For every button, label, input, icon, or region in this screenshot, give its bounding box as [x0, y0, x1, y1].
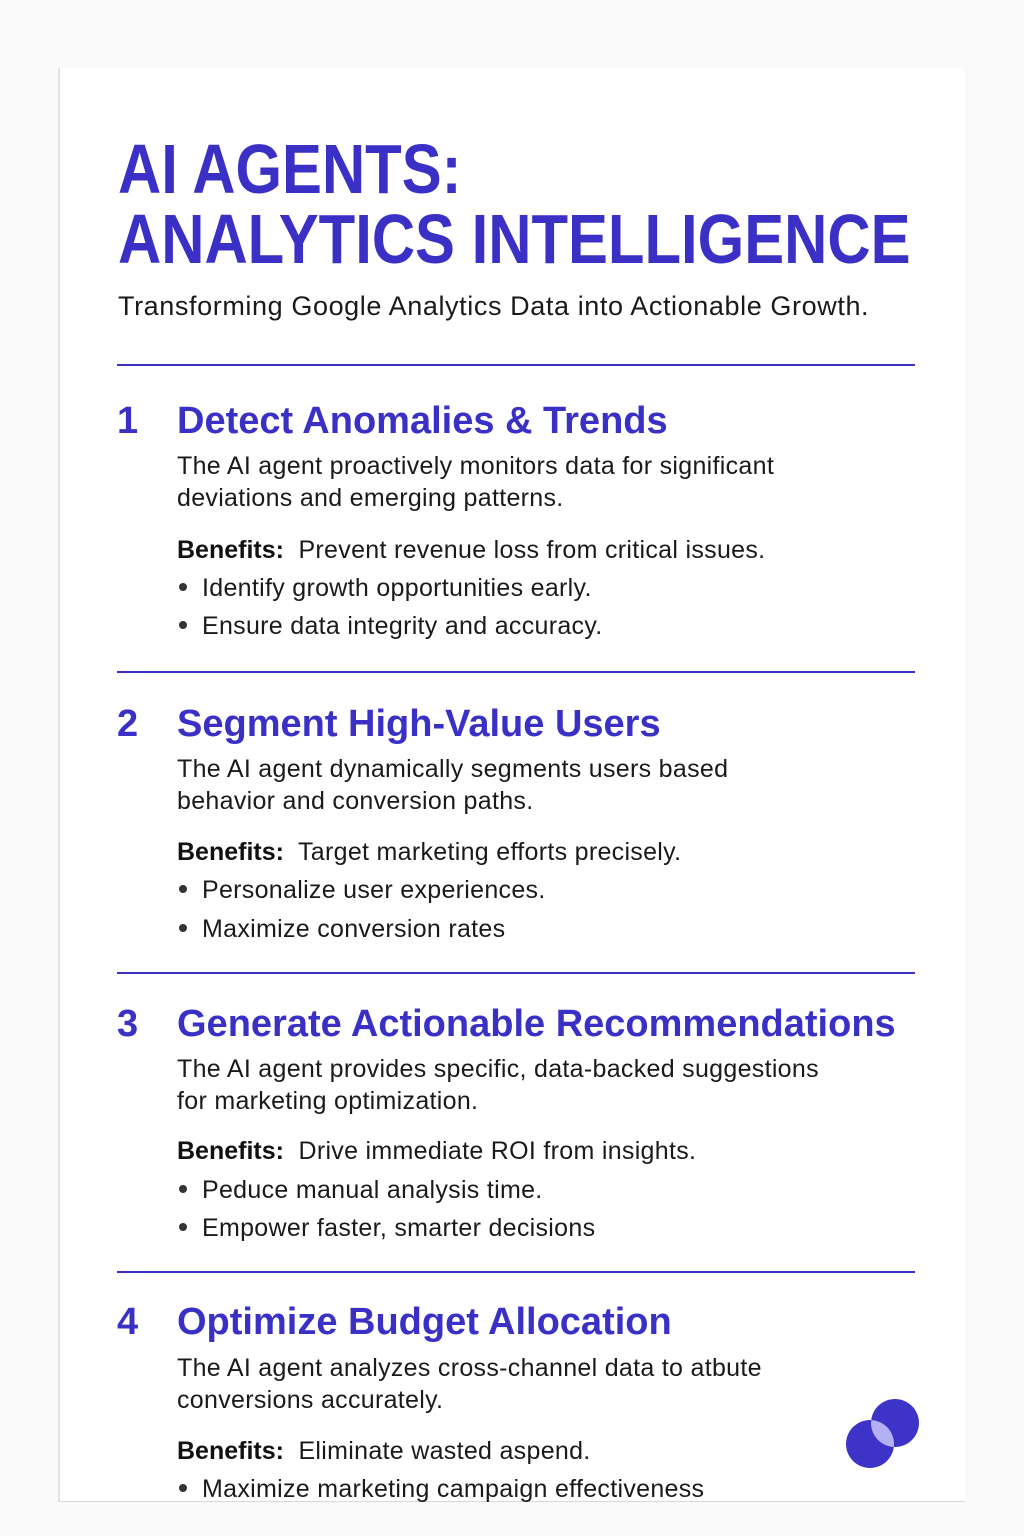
number 1: 1	[117, 400, 138, 442]
description 3: for marketing optimization.	[177, 1087, 478, 1115]
title: ANALYTICS INTELLIGENCE	[118, 200, 911, 278]
description 3: The AI agent provides specific, data-backed suggestions	[177, 1055, 819, 1083]
number 2: 2	[117, 703, 138, 745]
number 3: 3	[117, 1003, 138, 1045]
icon: overlapping circles logo	[846, 1399, 919, 1468]
benefits 1: Benefits: Prevent revenue loss from critical issues.	[177, 536, 765, 564]
section 3: Empower faster, smarter decisions	[202, 1214, 595, 1242]
subtitle: Transforming Google Analytics Data into Actionable Growth.	[118, 291, 869, 321]
description 1: deviations and emerging patterns.	[177, 484, 564, 512]
title: AI AGENTS:	[118, 130, 462, 208]
section 3: Peduce manual analysis time.	[202, 1176, 543, 1204]
description 2: The AI agent dynamically segments users based	[177, 755, 728, 783]
section 1: Ensure data integrity and accuracy.	[202, 612, 603, 640]
number 4: 4	[117, 1301, 138, 1343]
section 1	[117, 400, 774, 640]
benefits 2: Benefits: Target marketing efforts precisely.	[177, 838, 681, 866]
section 4: Maximize marketing campaign effectiveness	[202, 1475, 704, 1503]
section 1: Identify growth opportunities early.	[202, 574, 592, 602]
description 1: The AI agent proactively monitors data for significant	[177, 452, 774, 480]
benefits 3: Benefits: Drive immediate ROI from insights.	[177, 1137, 696, 1165]
benefits 4: Benefits: Eliminate wasted aspend.	[177, 1437, 591, 1465]
section 3	[117, 1003, 896, 1242]
section 2: Personalize user experiences.	[202, 876, 546, 904]
description 4: conversions accurately.	[177, 1386, 443, 1414]
description 4	[177, 1354, 762, 1414]
heading 1: Detect Anomalies & Trends	[177, 400, 668, 442]
section 4	[117, 1301, 762, 1503]
description 1	[177, 452, 774, 512]
description 2: behavior and conversion paths.	[177, 787, 533, 815]
description 3	[177, 1055, 819, 1115]
heading 3: Generate Actionable Recommendations	[177, 1003, 896, 1045]
title	[118, 130, 911, 278]
section 2: Maximize conversion rates	[202, 915, 505, 943]
description 4: The AI agent analyzes cross-channel data to atbute	[177, 1354, 762, 1382]
description 2	[177, 755, 728, 815]
heading 4: Optimize Budget Allocation	[177, 1301, 672, 1343]
heading 2: Segment High-Value Users	[177, 703, 661, 745]
section 2	[117, 703, 728, 943]
